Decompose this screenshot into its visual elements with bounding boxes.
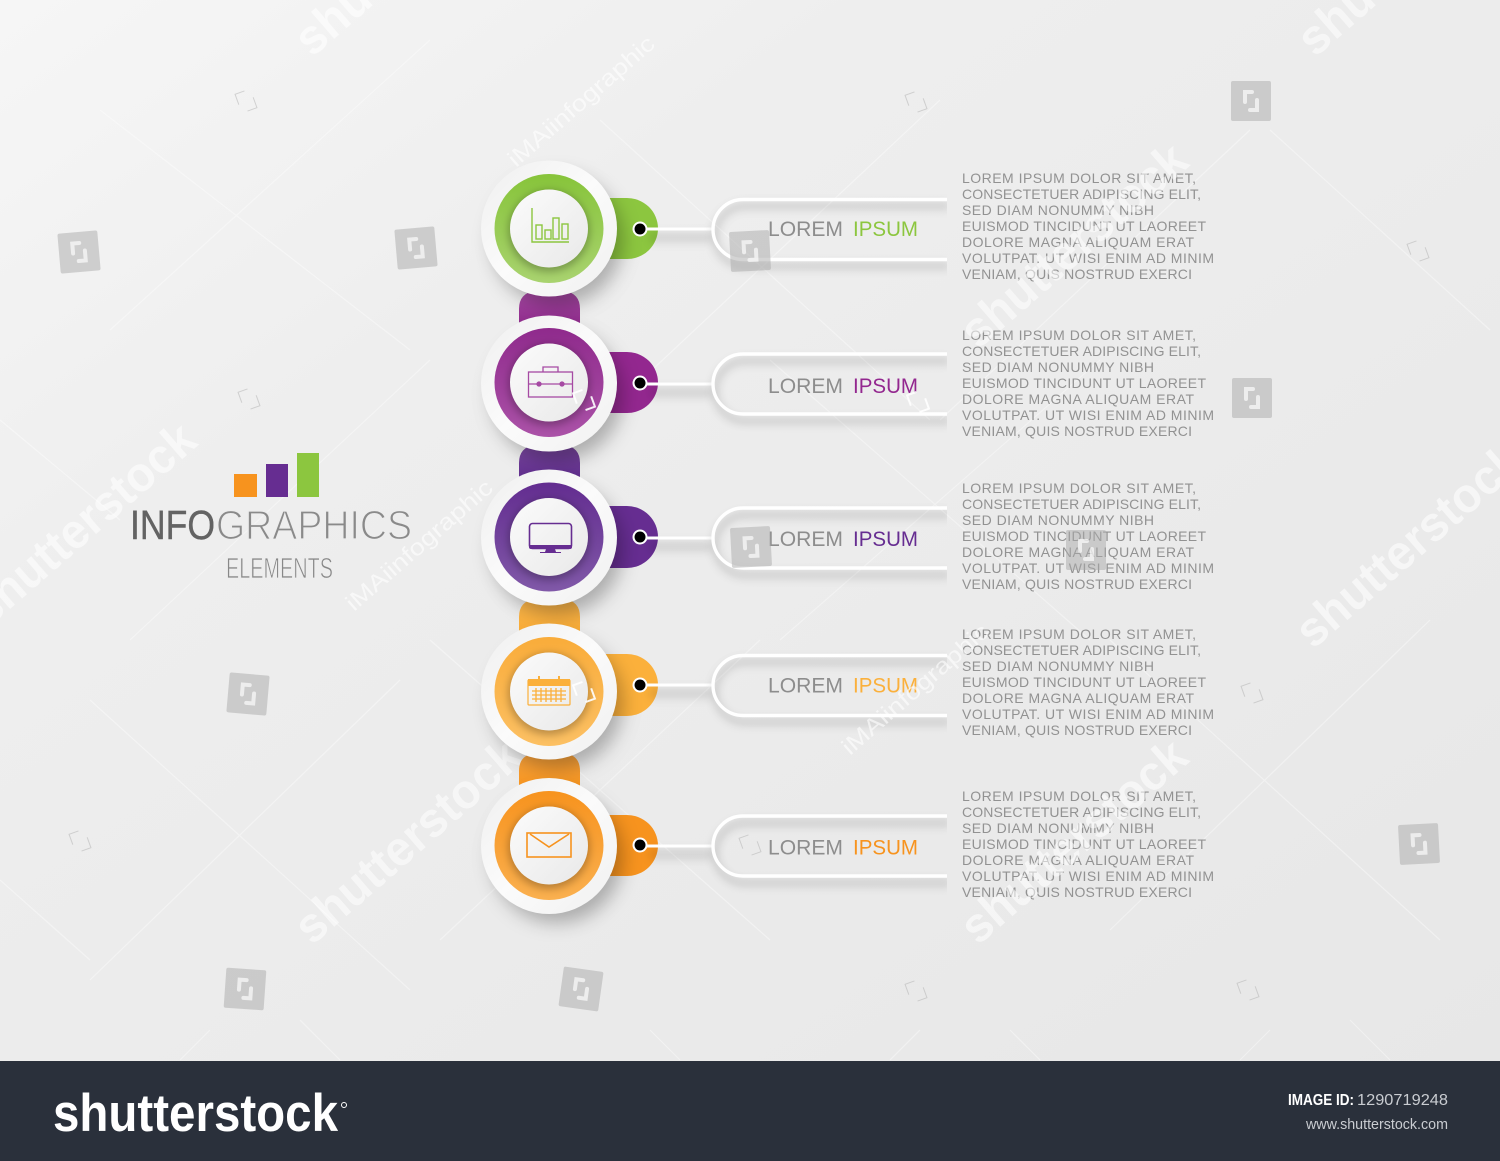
description text: SED DIAM NONUMMY NIBH — [962, 820, 1154, 836]
registered mark — [342, 1102, 346, 1108]
description text: VENIAM, QUIS NOSTRUD EXERCI — [962, 266, 1192, 282]
connector dot — [632, 376, 713, 397]
description text — [962, 170, 1214, 282]
label text: IPSUM — [853, 375, 918, 398]
image id: IMAGE ID: — [1288, 1092, 1354, 1109]
description text: EUISMOD TINCIDUNT UT LAOREET — [962, 375, 1206, 391]
description text: EUISMOD TINCIDUNT UT LAOREET — [962, 218, 1206, 234]
description text: LOREM IPSUM DOLOR SIT AMET, — [962, 480, 1196, 496]
label capsule — [713, 200, 950, 266]
circle badge — [481, 778, 623, 923]
description text: LOREM IPSUM DOLOR SIT AMET, — [962, 170, 1196, 186]
icon: envelope — [527, 833, 571, 857]
description text: SED DIAM NONUMMY NIBH — [962, 512, 1154, 528]
connector dot — [632, 678, 713, 698]
description text: DOLORE MAGNA ALIQUAM ERAT — [962, 234, 1194, 250]
logo title: INFO — [130, 502, 215, 548]
description text — [962, 327, 1214, 439]
description text: DOLORE MAGNA ALIQUAM ERAT — [962, 690, 1194, 706]
label text: IPSUM — [853, 528, 918, 551]
description text: LOREM IPSUM DOLOR SIT AMET, — [962, 626, 1196, 642]
description text — [962, 480, 1214, 592]
label capsule — [713, 508, 950, 575]
side tab — [605, 654, 658, 716]
logo bar icon — [234, 453, 319, 497]
website: www.shutterstock.com — [1305, 1116, 1448, 1133]
description text: SED DIAM NONUMMY NIBH — [962, 202, 1154, 218]
vertical connector tabs — [519, 291, 580, 787]
description text: DOLORE MAGNA ALIQUAM ERAT — [962, 391, 1194, 407]
watermark small outline marks — [69, 89, 1429, 1003]
description text: LOREM IPSUM DOLOR SIT AMET, — [962, 327, 1196, 343]
logo title — [130, 502, 412, 548]
logo: infographics elements — [130, 453, 412, 585]
label text: IPSUM — [853, 836, 918, 860]
logo title: GRAPHICS — [216, 502, 412, 548]
description text: VOLUTPAT. UT WISI ENIM AD MINIM — [962, 250, 1214, 266]
side tab — [605, 815, 658, 876]
step 3: violet — [481, 470, 1214, 615]
step 5: orange — [481, 778, 1214, 923]
step 1: green — [481, 160, 1214, 306]
connector dot — [632, 222, 713, 242]
description text: EUISMOD TINCIDUNT UT LAOREET — [962, 674, 1206, 690]
watermark grey squares — [57, 81, 1440, 1012]
description text: VOLUTPAT. UT WISI ENIM AD MINIM — [962, 560, 1214, 576]
label text: LOREM — [768, 674, 843, 698]
side tab — [605, 506, 658, 568]
icon: calendar — [528, 676, 570, 705]
description text: CONSECTETUER ADIPISCING ELIT, — [962, 642, 1201, 658]
circle badge — [481, 316, 623, 461]
label text: IPSUM — [853, 674, 918, 698]
description text: SED DIAM NONUMMY NIBH — [962, 359, 1154, 375]
description text: CONSECTETUER ADIPISCING ELIT, — [962, 496, 1201, 512]
connector dot — [632, 838, 713, 859]
description text: VENIAM, QUIS NOSTRUD EXERCI — [962, 423, 1192, 439]
description text: SED DIAM NONUMMY NIBH — [962, 658, 1154, 674]
footer logo: shutterstock — [53, 1084, 338, 1143]
description text: EUISMOD TINCIDUNT UT LAOREET — [962, 836, 1206, 852]
watermark overlays on content: shutterstock — [950, 728, 1199, 954]
label text: LOREM — [768, 218, 843, 241]
description text: VOLUTPAT. UT WISI ENIM AD MINIM — [962, 706, 1214, 722]
label text: IPSUM — [853, 218, 918, 241]
side tab — [605, 198, 658, 259]
label text: LOREM — [768, 528, 843, 551]
icon: briefcase — [528, 367, 572, 397]
description text: VOLUTPAT. UT WISI ENIM AD MINIM — [962, 407, 1214, 423]
label capsule — [713, 656, 950, 722]
watermark shutterstock text: iMAiinfographic — [340, 474, 498, 616]
connector dot — [632, 530, 713, 551]
side tab — [605, 352, 658, 413]
watermark overlays on content: shutterstock — [950, 132, 1199, 358]
description text: VENIAM, QUIS NOSTRUD EXERCI — [962, 722, 1192, 738]
watermark overlays on content: iMAiinfographic — [836, 618, 994, 760]
circle badge — [481, 470, 623, 615]
label text: LOREM — [768, 836, 843, 860]
description text: VENIAM, QUIS NOSTRUD EXERCI — [962, 884, 1192, 900]
description text: CONSECTETUER ADIPISCING ELIT, — [962, 186, 1201, 202]
step 4: light orange — [481, 624, 1214, 769]
description text: DOLORE MAGNA ALIQUAM ERAT — [962, 544, 1194, 560]
watermark overlays on content — [573, 132, 1199, 954]
description text — [962, 626, 1214, 738]
footer bar — [0, 1061, 1500, 1161]
circle badge — [481, 160, 623, 306]
circle badge — [481, 624, 623, 769]
description text: DOLORE MAGNA ALIQUAM ERAT — [962, 852, 1194, 868]
label capsule — [713, 816, 950, 883]
step 2: magenta — [481, 316, 1214, 461]
logo subtitle: ELEMENTS — [226, 553, 333, 585]
description text: VENIAM, QUIS NOSTRUD EXERCI — [962, 576, 1192, 592]
watermark shutterstock text: iMAiinfographic — [502, 30, 660, 172]
description text: CONSECTETUER ADIPISCING ELIT, — [962, 804, 1201, 820]
description text: VOLUTPAT. UT WISI ENIM AD MINIM — [962, 868, 1214, 884]
description text — [962, 788, 1214, 900]
label capsule — [713, 354, 950, 421]
description text: EUISMOD TINCIDUNT UT LAOREET — [962, 528, 1206, 544]
description text: CONSECTETUER ADIPISCING ELIT, — [962, 343, 1201, 359]
icon: monitor — [529, 524, 572, 553]
label text: LOREM — [768, 375, 843, 398]
description text: LOREM IPSUM DOLOR SIT AMET, — [962, 788, 1196, 804]
image id: 1290719248 — [1357, 1092, 1448, 1109]
watermark shutterstock text: shutterstock — [284, 728, 533, 954]
icon: bar chart — [532, 208, 569, 242]
